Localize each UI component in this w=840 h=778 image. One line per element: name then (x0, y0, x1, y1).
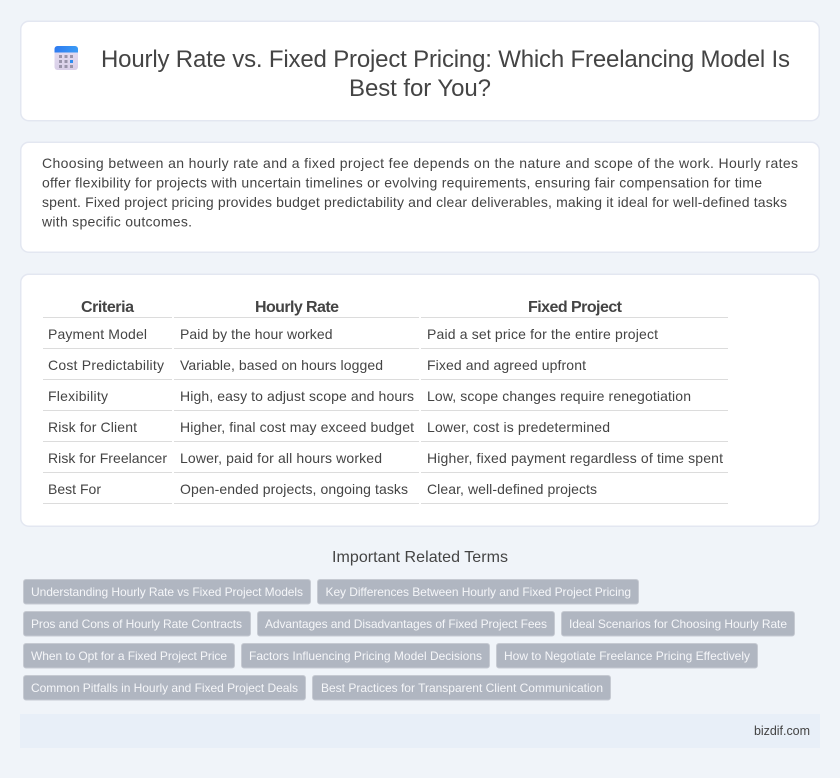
chip: ideal scenarios (562, 612, 794, 636)
chip: advantages (258, 612, 554, 636)
row: risk for client: Lower, cost is predetermined (427, 419, 610, 435)
row: best for: Open-ended projects, ongoing tasks (180, 481, 408, 497)
row: cost predictability (48, 357, 586, 373)
intro text block: offer flexibility for projects with uncertain timelines or evolving requirements, ensuring fair compensation for time (42, 174, 762, 190)
row: payment model: Paid by the hour worked (180, 326, 332, 342)
chip: ideal scenarios: Ideal Scenarios for Choosing Hourly Rate (569, 617, 787, 631)
chip: pros and cons (24, 612, 250, 636)
table header row (81, 299, 623, 316)
chip: best practices (312, 676, 610, 700)
panel: introduction (21, 142, 819, 252)
row: risk for freelancer (48, 450, 723, 466)
row: cost predictability: Cost Predictability (48, 357, 164, 373)
chip: pros and cons: Pros and Cons of Hourly Rate Contracts (31, 617, 242, 631)
footer bar (20, 714, 820, 748)
intro text block (41, 155, 798, 230)
row: risk for freelancer: Higher, fixed payment regardless of time spent (427, 450, 723, 466)
row: risk for freelancer: Lower, paid for all hours worked (180, 450, 382, 466)
chip: common pitfalls (24, 676, 306, 700)
row: flexibility: High, easy to adjust scope and hours (180, 388, 414, 404)
row: flexibility: Flexibility (48, 388, 108, 404)
chip: when to opt: When to Opt for a Fixed Project Price (31, 649, 227, 663)
chip: negotiate (496, 644, 758, 668)
chip: advantages: Advantages and Disadvantages of Fixed Project Fees (265, 617, 547, 631)
title: Hourly Rate vs. Fixed Project Pricing: Which Freelancing Model Is (101, 46, 790, 73)
row: risk for client (48, 419, 610, 435)
intro text block: spent. Fixed project pricing provides budget predictability and clear deliverables, making it ideal for well-defined tasks (42, 194, 787, 210)
row: flexibility: Low, scope changes require renegotiation (427, 388, 691, 404)
row: best for: Best For (48, 481, 101, 497)
panel: comparison table (21, 274, 819, 526)
chip: key differences: Key Differences Between Hourly and Fixed Project Pricing (326, 585, 631, 599)
chip: key differences (318, 580, 638, 604)
row: risk for freelancer: Risk for Freelancer (48, 450, 167, 466)
row: flexibility (48, 388, 691, 404)
icon: calendar (54, 46, 78, 70)
chip: understanding models (24, 580, 310, 604)
chip: negotiate: How to Negotiate Freelance Pricing Effectively (504, 649, 750, 663)
title: Best for You? (349, 75, 491, 102)
chip: factors: Factors Influencing Pricing Model Decisions (249, 649, 482, 663)
table header row: Criteria (81, 299, 134, 316)
table header row: Fixed Project (528, 299, 623, 316)
row: best for: Clear, well-defined projects (427, 481, 597, 497)
table header row: Hourly Rate (255, 299, 339, 316)
row: payment model: Payment Model (48, 326, 147, 342)
row: risk for client: Higher, final cost may exceed budget (180, 419, 414, 435)
row: cost predictability: Variable, based on hours logged (180, 357, 383, 373)
panel: header (21, 21, 819, 121)
row: cost predictability: Fixed and agreed upfront (427, 357, 586, 373)
chip: factors (242, 644, 490, 668)
chip: when to opt (24, 644, 234, 668)
chip: common pitfalls: Common Pitfalls in Hourly and Fixed Project Deals (31, 681, 298, 695)
heading: important related terms: Important Related Terms (332, 549, 508, 566)
related terms chips (24, 580, 794, 700)
title (101, 46, 790, 102)
chip: understanding models: Understanding Hourly Rate vs Fixed Project Models (31, 585, 303, 599)
row: risk for client: Risk for Client (48, 419, 137, 435)
footer source text: bizdif.com (754, 724, 810, 738)
row: payment model: Paid a set price for the entire project (427, 326, 658, 342)
intro text block: with specific outcomes. (41, 214, 192, 230)
row: best for (48, 481, 597, 497)
chip: best practices: Best Practices for Transparent Client Communication (321, 681, 603, 695)
row: payment model (48, 326, 658, 342)
intro text block: Choosing between an hourly rate and a fixed project fee depends on the nature and scope of the work. Hourly rates (42, 155, 798, 171)
